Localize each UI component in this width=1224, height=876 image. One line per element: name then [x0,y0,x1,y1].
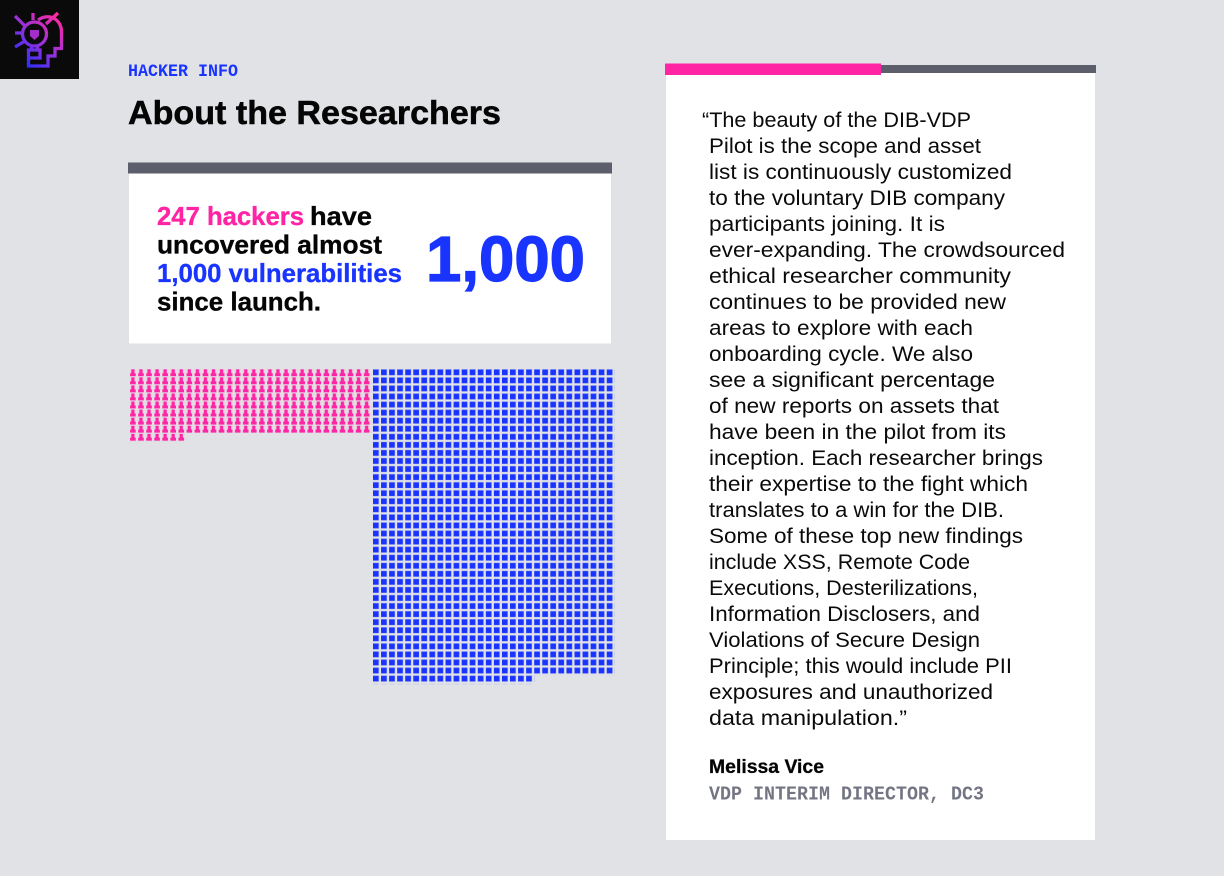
quote text: Information Disclosers, and [709,602,980,626]
quote text: Some of these top new findings [709,524,1023,548]
quote text: include XSS, Remote Code [709,550,970,574]
quote text: have been in the pilot from its [709,420,1006,444]
quote text: their expertise to the fight which [709,472,1028,496]
quote text: “The beauty of the DIB-VDP [702,108,971,132]
statistic sentence: uncovered almost [157,230,382,260]
quote text: see a significant percentage [709,368,995,392]
statistic sentence: since launch. [157,286,321,316]
quote text: data manipulation.” [709,706,907,730]
quote text: Pilot is the scope and asset [709,134,981,158]
panel: hacker statistic [128,162,612,344]
quote text: areas to explore with each [709,316,973,340]
quote text: ethical researcher community [709,264,1011,288]
quote text: ever-expanding. The crowdsourced [709,238,1065,262]
title: About the Researchers [128,94,501,131]
quote text: translates to a win for the DIB. [709,498,1004,522]
pictogram: 247 hackers [130,369,372,441]
quote text [702,108,1065,730]
eyebrow label: HACKER INFO [128,62,238,82]
quote text: onboarding cycle. We also [709,342,973,366]
pictogram: 1,000 vulnerabilities [373,369,615,684]
big number: 1,000 [426,223,585,295]
quote text: continues to be provided new [709,290,1006,314]
quote text: Executions, Desterilizations, [709,576,978,600]
statistic sentence: 247 hackers [157,201,304,231]
statistic sentence [157,201,402,316]
attribution role: VDP INTERIM DIRECTOR, DC3 [709,784,984,806]
statistic sentence: 1,000 vulnerabilities [157,258,402,288]
attribution name: Melissa Vice [709,756,824,778]
quote text: Violations of Secure Design [709,628,980,652]
quote text: inception. Each researcher brings [709,446,1043,470]
quote text: Principle; this would include PII [709,654,1012,678]
panel: researcher quote [665,64,1096,840]
quote text: of new reports on assets that [709,394,999,418]
quote text: list is continuously customized [709,160,1012,184]
logo: head with light bulb icon [0,0,79,79]
statistic sentence: have [310,201,372,231]
quote text: exposures and unauthorized [709,680,993,704]
quote text: participants joining. It is [709,212,945,236]
quote text: to the voluntary DIB company [709,186,1005,210]
